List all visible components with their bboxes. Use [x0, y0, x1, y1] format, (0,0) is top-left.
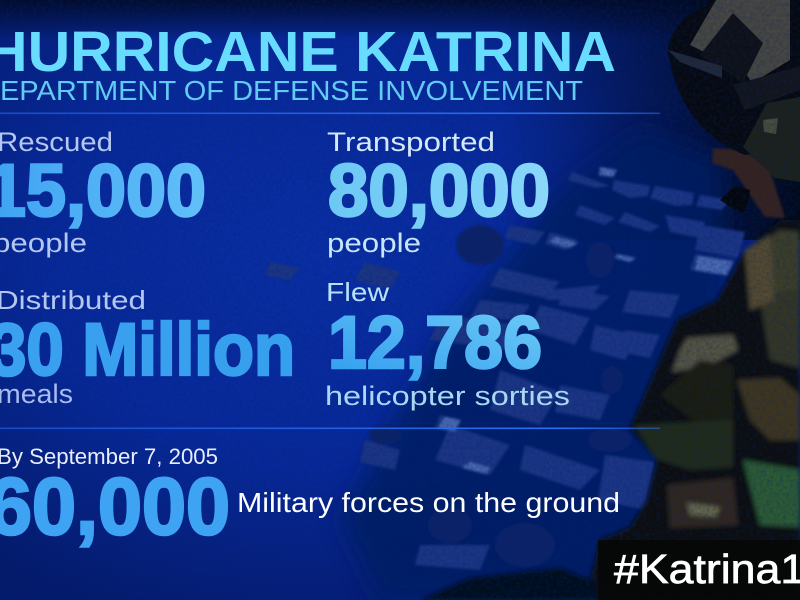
label: Rescued: Rescued: [0, 127, 113, 157]
stat: transported: [327, 127, 550, 258]
stat: military forces: [0, 444, 620, 552]
label: Flew: Flew: [326, 277, 389, 307]
divider bottom: [0, 428, 660, 429]
soldier's face: [712, 148, 785, 218]
label: Transported: Transported: [327, 127, 495, 157]
label: By September 7, 2005: By September 7, 2005: [0, 444, 218, 469]
stat: distributed: [0, 285, 295, 409]
stat: rescued: [0, 127, 206, 258]
label: Military forces on the ground: Military forces on the ground: [237, 487, 620, 518]
title: HURRICANE KATRINA: [0, 20, 616, 84]
boom microphone: [720, 186, 750, 213]
background photo: flooded neighbourhood rooftops: [265, 130, 745, 600]
soldier's body in camouflage: [420, 220, 800, 600]
number: 80,000: 80,000: [328, 149, 550, 232]
label: helicopter sorties: helicopter sorties: [325, 381, 570, 411]
label: people: people: [327, 228, 421, 258]
soldier photo: helicopter crew member: [420, 0, 800, 600]
number: 12,786: 12,786: [328, 301, 542, 384]
flight helmet: [668, 0, 800, 155]
stat: flew: [325, 277, 570, 411]
headset ear cup: [743, 97, 800, 182]
divider top: [0, 112, 660, 114]
hashtag box: [598, 540, 800, 600]
